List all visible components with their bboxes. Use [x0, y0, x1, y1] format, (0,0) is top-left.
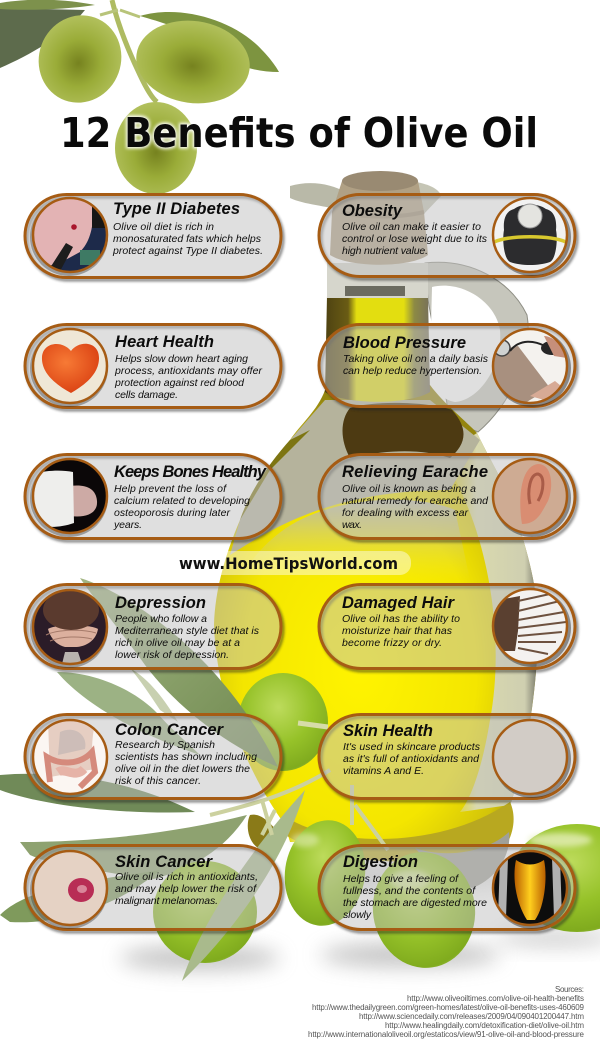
body text [115, 613, 260, 661]
body text [342, 613, 460, 649]
icon: ear [493, 459, 571, 537]
sources: Sources: [555, 985, 584, 994]
panel: Obesity [319, 194, 577, 279]
panel: Damaged Hair [319, 584, 577, 671]
body text [343, 873, 487, 921]
body text: osteoporosis during later [114, 507, 230, 519]
body text: rich in olive oil may be at a [115, 637, 240, 649]
body text: Olive oil is known as being a [342, 483, 476, 495]
body text [114, 353, 262, 401]
icon: colon [30, 720, 108, 798]
icon: scale [493, 198, 571, 276]
body text: Taking olive oil on a daily basis [343, 353, 489, 365]
icon: skin texture [493, 720, 571, 798]
olive oil bottle [214, 171, 538, 889]
neck [325, 296, 430, 402]
olive branch bottom [0, 578, 600, 981]
body text: protect against Type II diabetes. [112, 245, 263, 257]
body text: calcium related to developing [114, 495, 250, 507]
body text: years. [113, 519, 142, 531]
body text: People who follow a [115, 613, 207, 625]
cork [330, 171, 428, 265]
title: 12 Benefits of Olive Oil [60, 109, 538, 157]
body text [115, 739, 257, 787]
body text: Olive oil can make it easier to [342, 221, 481, 233]
body text: wax. [342, 519, 362, 531]
base [283, 802, 514, 862]
body text: monosaturated fats which helps [113, 233, 262, 245]
body text: Helps to give a feeling of [343, 873, 459, 885]
panel: Type II Diabetes [25, 194, 283, 280]
body text: and may help lower the risk of [115, 883, 257, 895]
sources [308, 985, 585, 1039]
heading: Relieving Earache [342, 463, 488, 481]
body text: Mediterranean style diet that is [115, 625, 260, 637]
body text: Research by Spanish [115, 739, 215, 751]
panel: Digestion [319, 846, 577, 932]
body text: high nutrient value. [342, 245, 428, 257]
body text: cells damage. [115, 389, 178, 401]
panel: Depression [25, 584, 283, 671]
panel: Skin Cancer [25, 846, 283, 932]
heading: Blood Pressure [343, 334, 466, 352]
icon: melanoma [30, 851, 108, 929]
body text: olive oil in the diet lowers the [115, 763, 250, 775]
panel: Heart Health [25, 324, 283, 410]
grey upper body [230, 400, 480, 555]
website url: www.HomeTipsWorld.com [179, 554, 398, 573]
oil body [214, 385, 538, 842]
body text: It's used in skincare products [343, 741, 481, 753]
body text [115, 871, 258, 907]
body text: natural remedy for earache and [342, 495, 489, 507]
heading: Keeps Bones Healthy [114, 463, 267, 481]
icon: blood pressure cuff [493, 329, 571, 407]
panel: Blood Pressure [319, 324, 577, 409]
sources: http://www.sciencedaily.com/releases/2009/04/090401200447.htm [359, 1012, 584, 1021]
heading: Depression [115, 594, 206, 612]
handle [425, 262, 528, 432]
heading: Heart Health [115, 333, 214, 351]
icon: depressed person [30, 590, 108, 668]
heading: Skin Health [343, 722, 433, 740]
pale glass band [450, 433, 538, 812]
title: 12 Benefits of Olive Oil [60, 109, 538, 157]
heading: Damaged Hair [342, 594, 456, 612]
panel: Colon Cancer [25, 714, 283, 801]
heading: Digestion [343, 853, 418, 871]
body text: risk of this cancer. [115, 775, 201, 787]
heading: Skin Cancer [115, 853, 214, 871]
sources: http://www.healingdaily.com/detoxification-diet/olive-oil.htm [385, 1021, 584, 1030]
body text: protection against red blood [114, 377, 245, 389]
heading: Type II Diabetes [113, 200, 240, 218]
body text [113, 483, 250, 531]
body text [342, 483, 489, 531]
spout rim [290, 183, 345, 212]
body text: Olive oil has the ability to [342, 613, 460, 625]
body text [343, 353, 489, 377]
olive branch top [0, 0, 279, 194]
heading: Obesity [342, 202, 403, 220]
sources: http://www.internationaloliveoil.org/estaticos/view/91-olive-oil-and-blood-pressure [308, 1030, 585, 1039]
sources: http://www.thedailygreen.com/green-homes/latest/olive-oil-benefits-uses-460609 [312, 1003, 585, 1012]
body text: the stomach are digested more [343, 897, 487, 909]
body text: lower risk of depression. [115, 649, 229, 661]
body text: moisturize hair that has [342, 625, 453, 637]
body text: Helps slow down heart aging [115, 353, 248, 365]
icon: digestive x-ray [493, 851, 571, 929]
body text: as it's full of antioxidants and [343, 753, 480, 765]
body text [342, 221, 488, 257]
body text: become frizzy or dry. [342, 637, 442, 649]
panel: Skin Health [319, 714, 577, 801]
body text [112, 221, 263, 257]
sources: http://www.oliveoiltimes.com/olive-oil-health-benefits [407, 994, 584, 1003]
body text: vitamins A and E. [343, 765, 424, 777]
body text: can help reduce hypertension. [343, 365, 482, 377]
panel: Keeps Bones Healthy [25, 454, 283, 541]
body text: malignant melanomas. [115, 895, 218, 907]
body text: scientists has shown including [115, 751, 257, 763]
icon: heart [30, 329, 108, 407]
body text: control or lose weight due to its [342, 233, 488, 245]
body text [343, 741, 481, 777]
body text: slowly [343, 909, 372, 921]
icon: blood glucose test [30, 198, 108, 276]
icon: cast [30, 459, 108, 537]
icon: frizzy hair [493, 589, 571, 667]
body text: Olive oil diet is rich in [113, 221, 214, 233]
body text: for dealing with excess ear [342, 507, 468, 519]
panel: Relieving Earache [319, 454, 577, 541]
body text: Help prevent the loss of [114, 483, 227, 495]
body text: process, antioxidants may offer [114, 365, 262, 377]
body text: Olive oil is rich in antioxidants, [115, 871, 258, 883]
heading: Colon Cancer [115, 721, 225, 739]
body text: fullness, and the contents of [343, 885, 476, 897]
